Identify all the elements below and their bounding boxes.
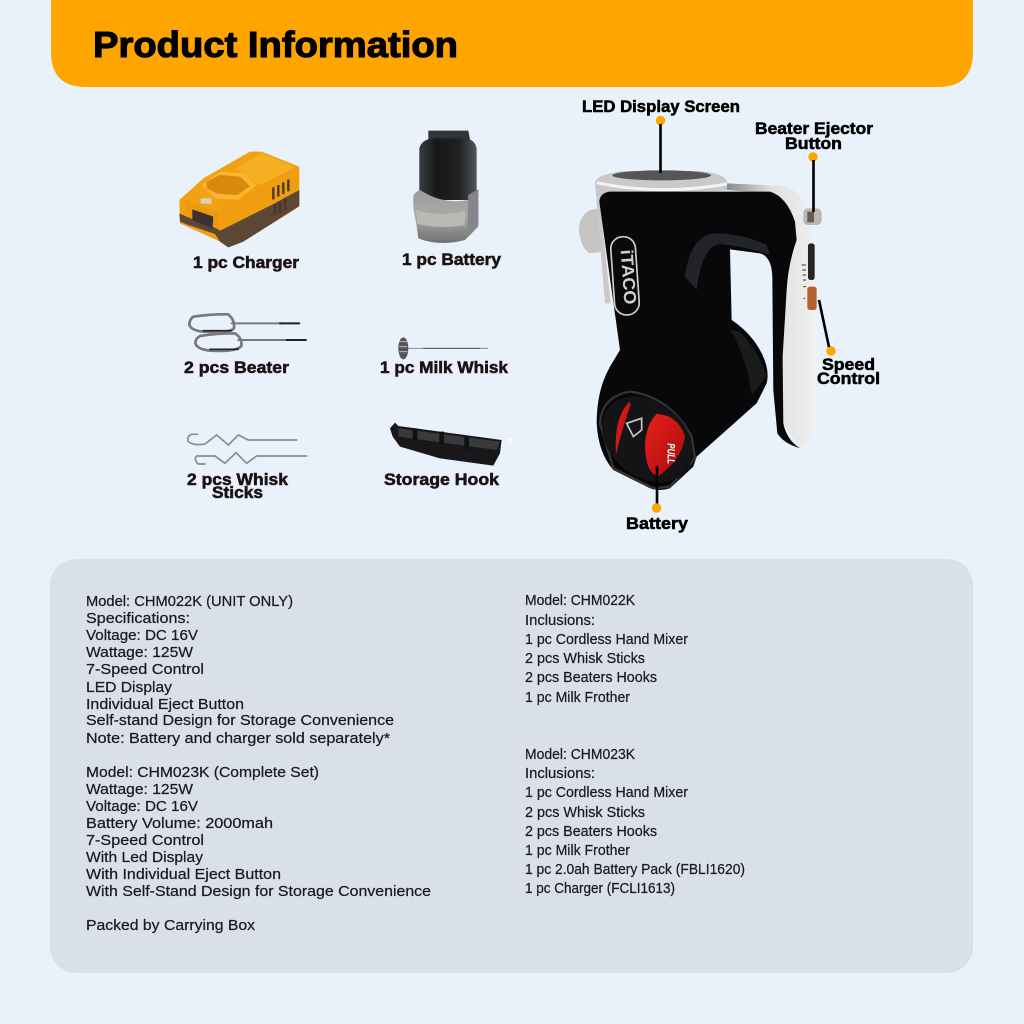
callout: battery: Battery [626,515,689,533]
text block: inclusions: Model: CHM023K [525,747,635,763]
text block: inclusions: 1 pc Cordless Hand Mixer [525,632,688,648]
text block: inclusions: 1 pc Milk Frother [525,843,630,859]
text block: model specifications: Individual Eject Button [86,697,244,713]
item: milk whisk [398,337,488,359]
text block: inclusions: 2 pcs Beaters Hooks [525,670,657,686]
text block: model specifications: Wattage: 125W [86,645,193,661]
item label: whisk sticks: Sticks [212,484,263,502]
speed slider [802,243,817,310]
mixer brand badge [610,236,640,316]
text block: model specifications: With Led Display [86,850,204,866]
icon: side knob [579,208,603,253]
text block: inclusions: 2 pcs Whisk Sticks [525,805,645,821]
callout: speed control: Control [817,370,880,388]
text block: model specifications: Model: CHM022K (UNIT ONLY) [86,594,293,610]
text block: inclusions: Inclusions: [525,613,595,629]
text block: model specifications [86,594,431,934]
item: beaters [189,314,306,351]
text block: model specifications: Battery Volume: 2000mah [86,816,273,832]
text block: model specifications: Specifications: [86,611,190,627]
callout: LED display screen [582,98,740,173]
item label: charger: 1 pc Charger [193,254,300,272]
text block: model specifications: Note: Battery and charger sold separately* [86,731,390,747]
hand mixer photo [579,170,822,500]
item: battery [413,131,478,243]
text block: model specifications: Voltage: DC 16V [86,799,198,815]
item: charger [179,152,299,247]
text block: model specifications: With Self-Stand Design for Storage Convenience [86,884,431,900]
item: whisk sticks [188,434,307,464]
callout: speed control [817,300,880,388]
text block: inclusions: 1 pc Charger (FCLI1613) [525,881,675,897]
callout: beater ejector button [755,120,874,212]
text block: model specifications: Model: CHM023K (Complete Set) [86,765,319,781]
text block: inclusions: 1 pc 2.0ah Battery Pack (FBLI1620) [525,862,745,878]
callout: speed control: Speed [822,356,875,374]
text block: inclusions: Inclusions: [525,766,595,782]
text block: inclusions: 2 pcs Whisk Sticks [525,651,645,667]
mixer brand badge: iTACO [617,249,640,305]
text block: inclusions: 2 pcs Beaters Hooks [525,824,657,840]
text block: model specifications: Packed by Carrying Box [86,918,256,934]
mixer black body [597,192,800,490]
mixer silver handle [727,183,815,448]
callout: beater ejector button: Beater Ejector [755,120,874,138]
item label: beaters: 2 pcs Beater [184,359,290,377]
callout: LED display screen: LED Display Screen [582,98,740,116]
header banner [51,0,973,87]
item label: battery: 1 pc Battery [402,251,502,269]
callout: beater ejector button: Button [785,135,842,153]
mixer silver top ring [595,171,727,303]
text block: model specifications: 7-Speed Control [86,833,204,849]
text block: model specifications: Self-stand Design for Storage Convenience [86,713,394,729]
item: storage hook [390,423,512,466]
label: pull: PULL [664,443,676,464]
text block: model specifications: Voltage: DC 16V [86,628,198,644]
text block: inclusions: 1 pc Cordless Hand Mixer [525,785,688,801]
item label: milk whisk: 1 pc Milk Whisk [380,359,509,377]
text block: model specifications: LED Display [86,680,173,696]
text block: inclusions: 1 pc Milk Frother [525,690,630,706]
text block: model specifications: Wattage: 125W [86,782,193,798]
ejector button [803,208,822,225]
panel: specifications [50,559,973,973]
text block: inclusions [525,593,745,897]
item label: storage hook: Storage Hook [384,471,500,489]
battery end cap [585,379,710,500]
callout: battery [626,466,689,533]
title: Product Information [93,24,458,65]
text block: inclusions: Model: CHM022K [525,593,635,609]
text block: model specifications: 7-Speed Control [86,662,204,678]
text block: model specifications: With Individual Eject Button [86,867,281,883]
item label: whisk sticks: 2 pcs Whisk [187,471,289,489]
item label: whisk sticks [187,471,289,502]
